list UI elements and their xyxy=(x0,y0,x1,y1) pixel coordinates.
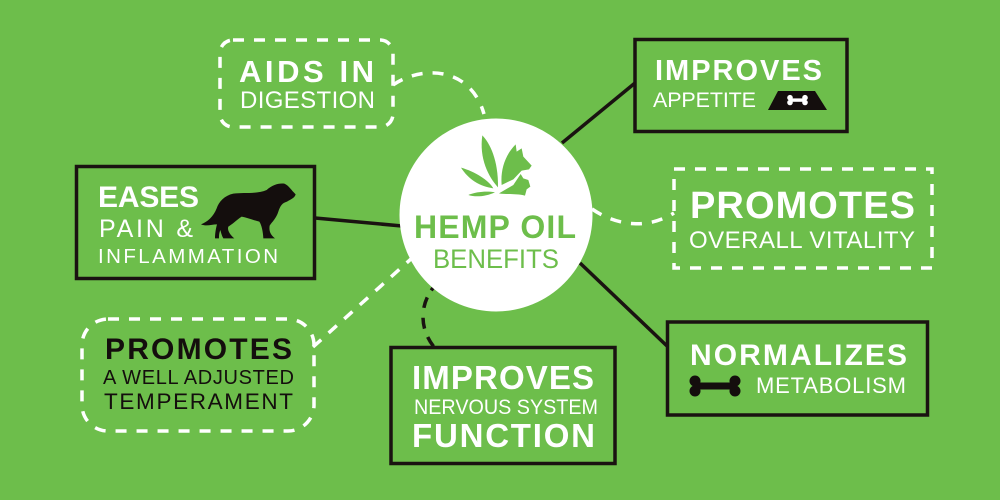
icon: hemp leaf with dog and cat xyxy=(461,135,532,196)
text: metabolism: METABOLISM xyxy=(756,373,906,398)
center circle: hemp oil benefits xyxy=(400,118,592,312)
heading: normalizes: NORMALIZES xyxy=(690,339,907,372)
panel: eases pain and inflammation xyxy=(76,166,314,278)
panel: improves appetite xyxy=(635,40,847,132)
heading: promotes: PROMOTES xyxy=(690,185,915,227)
panel: normalizes metabolism xyxy=(668,322,928,415)
text: benefits: BENEFITS xyxy=(433,244,559,274)
connector: improves appetite xyxy=(562,83,635,143)
panel: aids in digestion xyxy=(220,40,393,127)
heading: aids in: AIDS IN xyxy=(239,54,374,89)
heading: hemp oil: HEMP OIL xyxy=(414,209,576,245)
connector: promotes vitality xyxy=(592,209,674,224)
text: inflammation: INFLAMMATION xyxy=(98,245,278,268)
heading: improves: IMPROVES xyxy=(655,55,822,87)
connector: eases pain xyxy=(315,218,402,226)
heading: improves: IMPROVES xyxy=(412,359,594,396)
text: pain and: PAIN & xyxy=(99,215,193,243)
panel: promotes overall vitality xyxy=(674,169,932,268)
text: appetite: APPETITE xyxy=(653,88,756,112)
text: overall vitality: OVERALL VITALITY xyxy=(689,227,915,254)
heading: promotes: PROMOTES xyxy=(105,333,292,366)
heading: function: FUNCTION xyxy=(412,417,595,454)
text: digestion: DIGESTION xyxy=(240,87,375,114)
icon: dog silhouette xyxy=(201,184,296,238)
panel: promotes well adjusted temperament xyxy=(82,319,314,431)
panel: improves nervous system function xyxy=(391,348,615,464)
text: nervous system: NERVOUS SYSTEM xyxy=(414,396,598,419)
connector: aids in digestion xyxy=(393,73,484,114)
heading: eases: EASES xyxy=(98,181,199,214)
connector: promotes temperament xyxy=(313,258,412,347)
text: temperament: TEMPERAMENT xyxy=(104,389,293,414)
icon: bone xyxy=(690,376,740,396)
text: a well adjusted: A WELL ADJUSTED xyxy=(103,367,294,389)
icon: dog bowl with bone xyxy=(768,91,827,110)
connector: nervous system xyxy=(423,288,434,347)
connector: normalizes metabolism xyxy=(580,263,667,346)
